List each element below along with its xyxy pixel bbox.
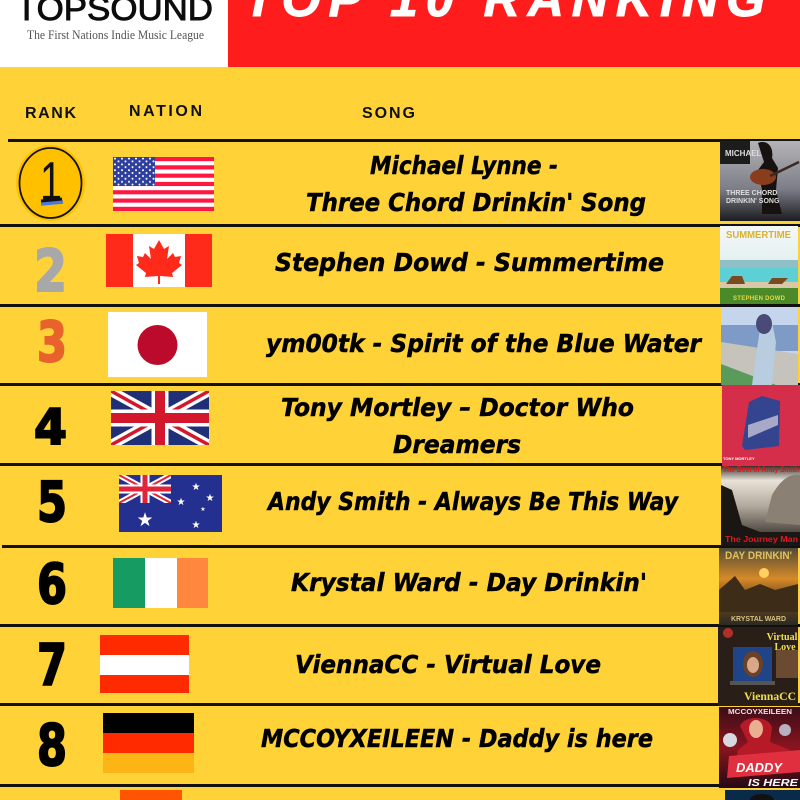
rank 3: 3 (37, 310, 67, 374)
flag: Japan (108, 312, 207, 377)
album cover 5: The Journey Man (725, 534, 798, 544)
song 1 title: Michael Lynne - (370, 151, 558, 180)
album cover 4 (722, 385, 800, 466)
album cover 6: KRYSTAL WARD (731, 616, 786, 623)
song 8 title: MCCOYXEILEEN - Daddy is here (261, 724, 653, 753)
rank 8: 8 (37, 713, 67, 779)
logo tagline: The First Nations Indie Music League (27, 28, 204, 42)
album cover 8: DADDY (736, 760, 783, 775)
album cover 9 partial (725, 790, 800, 800)
album cover 7: Love (774, 642, 796, 653)
column header: song: SONG (362, 105, 415, 122)
flag: United Kingdom (111, 391, 209, 445)
album cover 2: SUMMERTIME (726, 229, 791, 241)
song 4 title: Dreamers (393, 430, 521, 459)
rank 2: 2 (34, 237, 67, 305)
flag: Austria (100, 635, 189, 693)
rank 1 badge (16, 145, 85, 221)
song 1 title: Three Chord Drinkin' Song (306, 188, 646, 217)
song 4 title: Tony Mortley – Doctor Who (281, 393, 634, 422)
album cover 2 (720, 226, 798, 304)
album cover 1: DRINKIN' SONG (726, 198, 780, 205)
album cover 1: THREE CHORD (726, 190, 777, 197)
album cover 8 (719, 707, 800, 789)
album cover 7: ViennaCC (744, 689, 796, 703)
partial rank 9 flag (120, 790, 182, 800)
rank 5: 5 (37, 470, 67, 534)
flag: Australia: ★ (192, 482, 201, 493)
album cover 2: STEPHEN DOWD (733, 296, 786, 302)
rank 4: 4 (34, 399, 67, 456)
album cover 8: IS HERE (748, 778, 798, 789)
rank 7: 7 (37, 633, 67, 699)
album cover 5 (721, 465, 800, 546)
flag: Australia (119, 475, 222, 532)
album cover 6: DAY DRINKIN' (725, 550, 792, 562)
flag: Canada (106, 234, 212, 287)
album cover 3 (721, 307, 798, 385)
flag: Australia: ★ (177, 497, 186, 508)
flag: Australia: ★ (200, 506, 206, 513)
album cover 1: MICHAEL (725, 149, 762, 158)
song 5 title: Andy Smith - Always Be This Way (266, 487, 679, 516)
flag: Ireland (113, 558, 208, 608)
song 2 title: Stephen Dowd - Summertime (275, 248, 664, 277)
album cover 4: TONY MORTLEY (723, 456, 755, 461)
rank 1 numeral: 1 (40, 150, 62, 212)
flag: Germany (103, 713, 194, 773)
song 1 title (306, 151, 646, 217)
song 6 title: Krystal Ward - Day Drinkin' (291, 568, 647, 597)
song 4 title (281, 393, 634, 459)
logo panel (0, 0, 228, 67)
album cover 1 (720, 141, 800, 221)
flag: Australia: ★ (192, 520, 201, 531)
album cover 7 (718, 627, 798, 706)
flag: Australia: ★ (206, 493, 215, 504)
column header: rank: RANK (25, 105, 76, 122)
album cover 7: Virtual (767, 632, 798, 643)
flag: United States (113, 157, 214, 211)
song 7 title: ViennaCC - Virtual Love (295, 650, 601, 679)
rank 6: 6 (37, 552, 67, 616)
title banner (228, 0, 800, 67)
album cover 6 (719, 548, 798, 625)
album cover 8: MCCOYXEILEEN (728, 709, 792, 716)
flag: Australia: ★ (136, 509, 154, 531)
column header: nation: NATION (129, 103, 202, 120)
song 3 title: ym00tk - Spirit of the Blue Water (266, 329, 703, 358)
